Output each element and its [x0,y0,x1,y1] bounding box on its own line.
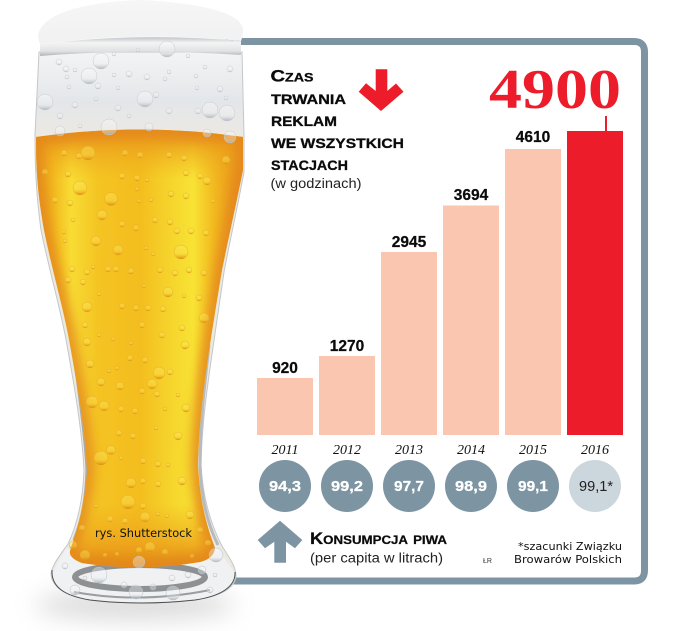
foam top [38,0,243,44]
beer glass illustration [30,0,250,620]
heading unit note: (w godzinach) [270,176,362,191]
icon: red down arrow [359,69,404,111]
bar 2016 [567,131,623,435]
glass waist reflections [71,330,218,545]
droplets on beer [42,146,230,560]
bar 2012 [319,356,375,435]
beer consumption circles [259,460,621,512]
bar values: 3694 [454,187,489,204]
footnote: Browarów Polskich [514,553,622,566]
glass shadow [35,590,235,620]
total value 4900: 4900 [489,59,621,121]
heading: ad duration: TRWANIA [271,92,346,107]
bar 2015 [505,149,561,435]
bar values [272,129,550,377]
droplets on foam [37,41,236,143]
circle 2012 [321,460,373,512]
photo credit: rys. Shutterstock [95,526,192,540]
bar values: 920 [272,360,298,377]
year labels: 2015 [519,443,547,458]
bar 2011 [257,378,313,435]
circle 2011 [259,460,311,512]
heading: ad duration: REKLAM [271,114,337,129]
heading: ad duration: STACJACH [271,158,348,173]
heading: ad duration: Czas [270,66,314,86]
bar values: 4610 [516,129,550,146]
circle 2016 estimate: 99,1* [579,479,613,495]
circle 2014: 98,9 [455,478,487,495]
heading: ad duration: WE WSZYSTKICH [271,136,404,151]
bar values: 2945 [392,234,427,251]
circle 2014 [445,460,497,512]
circle 2016 estimate [569,460,621,512]
icon: grey up arrow [258,521,302,563]
bar 2014 [443,206,499,435]
circle 2011: 94,3 [269,478,301,495]
panel frame [225,42,644,581]
droplets on glass base [62,548,223,600]
circle 2012: 99,2 [331,478,363,495]
tick to total [605,116,607,131]
glass base [52,546,235,603]
circle 2015: 99,1 [518,478,548,495]
heading: beer consumption: Konsumpcja piwa [310,530,447,548]
year labels [272,443,609,458]
year labels: 2013 [395,443,423,458]
year labels: 2011 [272,443,298,458]
consumption unit note: (per capita w litrach) [310,550,443,566]
footnote: *szacunki Związku [518,540,622,553]
beer [30,120,250,575]
circle 2015 [507,460,559,512]
circle 2013 [383,460,435,512]
heading: ad duration [270,66,404,173]
bar values: 1270 [330,338,364,355]
glass rim [40,37,241,56]
footnote [514,540,622,566]
glass body [35,52,244,603]
bar 2013 [381,252,437,435]
bar chart: ad hours [257,116,623,435]
circle 2013: 97,7 [394,478,424,495]
year labels: 2012 [333,443,361,458]
year labels: 2014 [457,443,485,458]
year labels: 2016 [581,443,609,458]
author initials: ŁR [483,558,492,565]
